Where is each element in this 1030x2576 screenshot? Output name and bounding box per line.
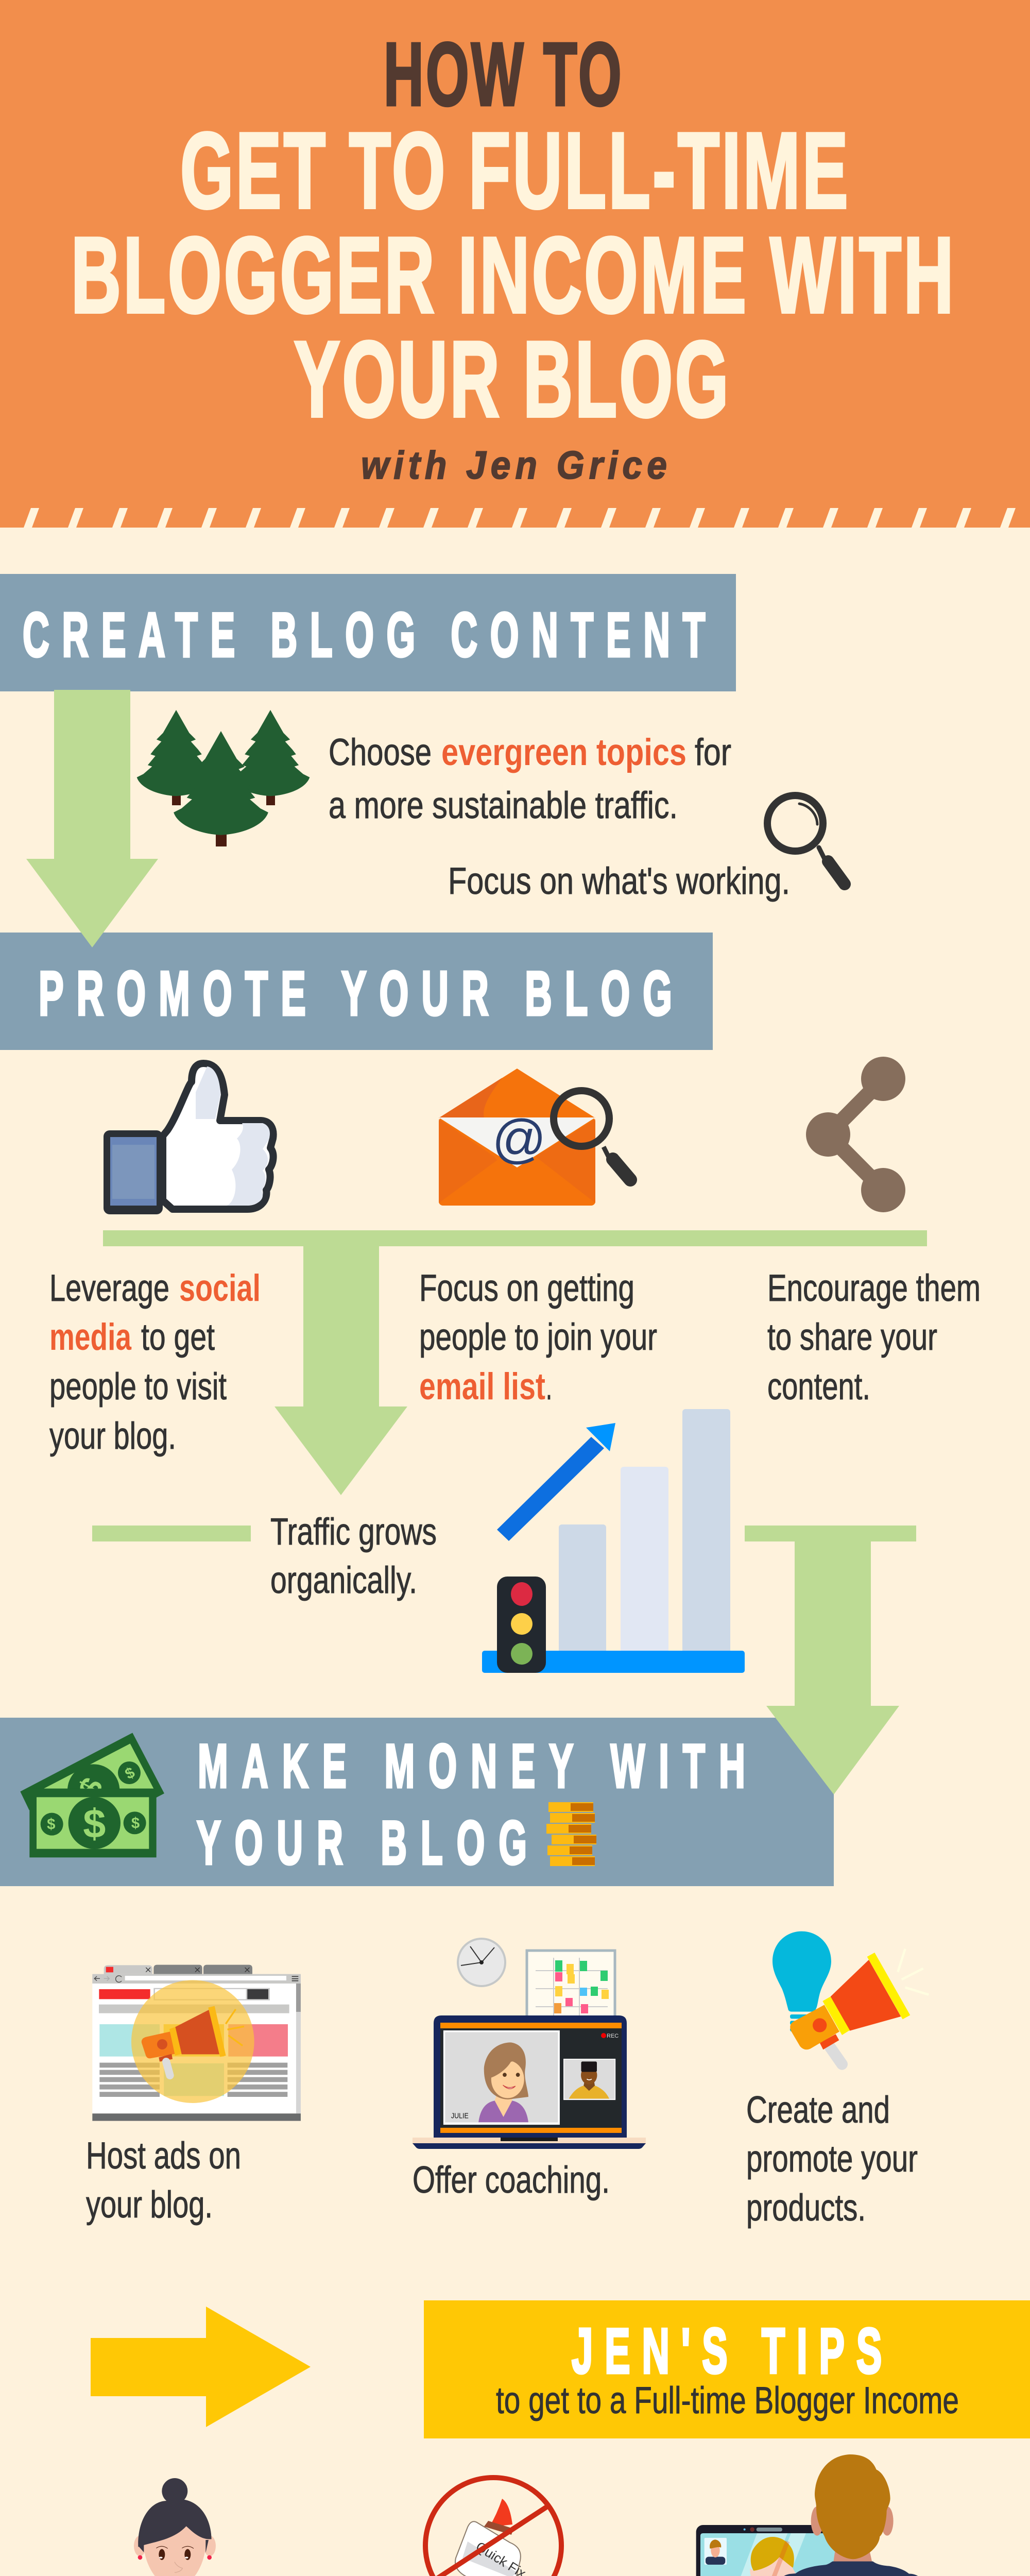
arrow: growth [497, 1423, 615, 1541]
arrow: right connector into make money [745, 1526, 916, 1794]
text: traffic grows [270, 1511, 437, 1601]
arrow: yellow to tips [91, 2307, 311, 2427]
text: host ads: Host ads on [86, 2135, 241, 2177]
big video tile: Julie [443, 2030, 560, 2125]
arrow: T-bar down to traffic [103, 1230, 927, 1495]
icon: email envelope: @ [492, 1109, 546, 1169]
text: encourage sharing: to share your [767, 1316, 937, 1358]
heading bar: promote your blog [0, 933, 713, 1050]
icon: share [806, 1057, 905, 1212]
icon: money: $ [47, 1816, 55, 1833]
icon: money: $ [83, 1801, 106, 1846]
heading bar: make money: YOUR BLOG [197, 1808, 541, 1877]
icon: magnifier [767, 795, 845, 884]
text: leverage social media [49, 1267, 261, 1457]
icon: browser with ad [92, 1965, 301, 2121]
bar chart: traffic growth [482, 1409, 745, 1673]
icon: thumbs up [104, 1063, 273, 1214]
text: evergreen topics [329, 732, 731, 826]
icon: traffic light [497, 1577, 546, 1673]
title: how to: HOW TO [384, 24, 624, 124]
icon: woman at computer [89, 2478, 247, 2576]
text: encourage sharing [767, 1267, 981, 1408]
text: email list: Focus on getting [419, 1267, 634, 1309]
text: evergreen topics: a more sustainable traffic. [329, 785, 678, 826]
panel: Jen's tips [424, 2300, 1030, 2438]
text: evergreen topics: for [695, 732, 731, 773]
text: leverage social media: people to visit [49, 1366, 227, 1408]
text: evergreen topics: Choose [329, 732, 432, 773]
icon: evergreen trees [137, 710, 310, 846]
text: email list: people to join your [419, 1316, 657, 1358]
text: create products [746, 2089, 918, 2229]
icon: coaching laptop [413, 1939, 646, 2149]
text: host ads: your blog. [86, 2184, 213, 2226]
icon: wall clock [458, 1939, 505, 1986]
icon: money: $ [131, 1815, 140, 1832]
heading bar: make money [0, 1718, 834, 1886]
title: main headline: YOUR BLOG [294, 319, 731, 439]
arrow: create to promote [26, 690, 158, 947]
left connector bar [92, 1526, 251, 1541]
icon: coaching laptop: REC [607, 2033, 619, 2039]
stripe edge [24, 508, 1016, 528]
text: create products: promote your [746, 2138, 918, 2180]
planning board [527, 1951, 615, 2018]
text: leverage social media: to get [141, 1316, 215, 1358]
text: leverage social media: social [179, 1267, 261, 1309]
text: create products: Create and [746, 2089, 890, 2131]
icon: coin stacks [546, 1802, 596, 1866]
text: offer coaching: Offer coaching. [413, 2159, 610, 2201]
text: traffic grows: organically. [270, 1560, 417, 1601]
icon: no quick fix [425, 2478, 561, 2576]
title: main headline [71, 111, 956, 439]
text: email list: email list [419, 1366, 545, 1408]
text: encourage sharing: content. [767, 1366, 870, 1408]
icon: money: $ [72, 1772, 110, 1803]
header panel [0, 0, 1030, 528]
icon: money [20, 1733, 164, 1857]
text: email list [419, 1267, 657, 1408]
icon: email envelope [439, 1069, 630, 1206]
text: evergreen topics: evergreen topics [441, 732, 686, 773]
text: leverage social media: media [49, 1316, 132, 1358]
icon: lightbulb and megaphone [772, 1931, 929, 2064]
text: host ads [86, 2135, 241, 2226]
text: leverage social media: Leverage [49, 1267, 169, 1309]
small video tile: Robert [563, 2059, 615, 2100]
icon: mentor video call [685, 2454, 933, 2576]
text: email list: . [546, 1366, 552, 1408]
text: focus on what's working: Focus on what's working. [448, 860, 790, 902]
text: traffic grows: Traffic grows [270, 1511, 437, 1553]
text: create products: products. [746, 2187, 866, 2229]
heading bar: create blog content [0, 574, 736, 691]
big video tile: Julie: JULIE [451, 2111, 469, 2120]
byline: with Jen Grice [361, 444, 672, 487]
icon: money: $ [122, 1764, 138, 1783]
text: leverage social media: your blog. [49, 1415, 176, 1457]
